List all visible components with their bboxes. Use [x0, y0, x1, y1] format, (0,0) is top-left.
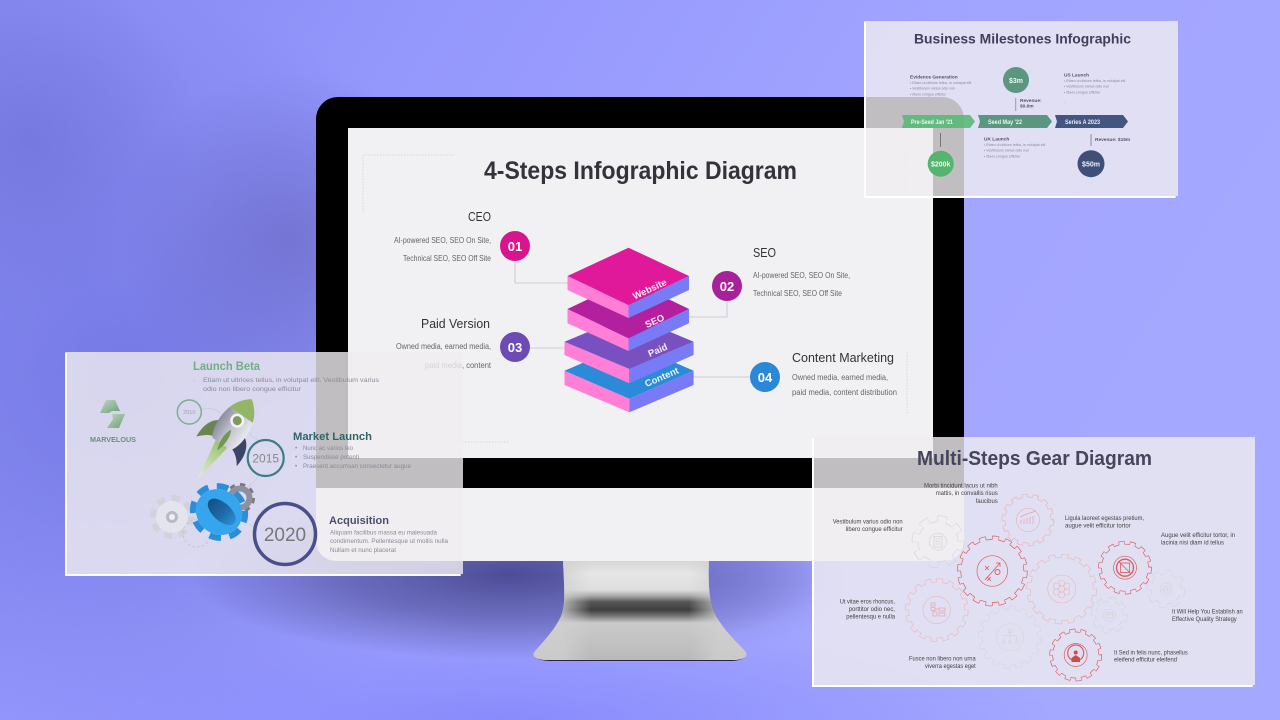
gear notes: It Will Help You Establish an	[1172, 609, 1243, 616]
slide title: 4-Steps Infographic Diagram	[484, 157, 797, 185]
note: evidence generation	[910, 74, 972, 96]
milestone: 50m	[1078, 134, 1130, 177]
gear: chart	[1002, 494, 1054, 546]
note: uk launch: UK Launch	[984, 136, 1009, 142]
step 04: 04	[758, 370, 773, 385]
layer: paid: Paid	[647, 342, 670, 360]
milestone: 200k	[928, 133, 954, 177]
acquisition: condimentum. Pellentesque ut mollis nulla	[330, 538, 449, 545]
monitor bezel	[316, 97, 964, 488]
gear notes: Fusce non libero non urna	[909, 656, 976, 663]
heading: launch beta	[193, 361, 379, 393]
milestone: 50m: Revenue: $15m	[1095, 137, 1130, 143]
step 04: paid media, content distribution	[792, 388, 897, 397]
corner guides	[363, 140, 922, 442]
year 2015: 2015	[252, 452, 279, 466]
layer: content	[564, 343, 694, 412]
layer: seo: SEO	[644, 313, 666, 331]
step 01: CEO	[468, 210, 491, 224]
gear: percent	[957, 536, 1027, 606]
gear notes: pellentesqu e nulla	[846, 613, 895, 620]
gear notes: faucibus	[976, 498, 998, 505]
heading: launch beta: ·	[193, 377, 195, 384]
heading: launch beta: odio non libero congue efficitur	[203, 386, 301, 393]
step 03	[396, 317, 530, 370]
panel heading: Business Milestones Infographic	[914, 30, 1131, 46]
note: us launch: • Vestibulum varius odio non	[1064, 84, 1109, 88]
panel: business milestones	[864, 21, 1178, 198]
gear notes: porttitor odio nec,	[849, 606, 895, 613]
milestone: 3m	[1003, 67, 1042, 111]
year 2010: 2010	[183, 410, 195, 416]
step 03: Paid Version	[421, 317, 490, 331]
panel card	[864, 21, 1178, 198]
panel card	[812, 437, 1255, 687]
panel heading: Multi-Steps Gear Diagram	[917, 448, 1152, 470]
monitor screen	[348, 128, 933, 458]
gear notes: It Sed in felis nunc, phasellus	[1114, 649, 1188, 656]
note: uk launch: • libero congue efficitur	[984, 154, 1021, 158]
dark gear	[227, 485, 253, 511]
gear: hierarchy	[978, 606, 1042, 669]
step 02: SEO	[753, 246, 776, 260]
gear notes: Ut vitae eros rhoncus,	[840, 599, 895, 606]
light gear	[153, 498, 191, 536]
logo: marvelous	[90, 400, 136, 444]
year 2020: 2020	[264, 525, 306, 546]
milestone: 3m: Revenue:	[1020, 98, 1042, 104]
milestone bar: pre-seed	[902, 115, 975, 128]
monitor stand	[533, 560, 747, 661]
layer: seo	[568, 280, 689, 351]
connector lines	[515, 260, 750, 377]
step 03: Owned media, earned media,	[396, 342, 491, 351]
market launch: Nunc ac varius leo	[303, 445, 354, 452]
note: evidence generation: Evidence Generation	[910, 74, 958, 80]
stacked layers diagram	[564, 248, 694, 412]
market launch: Praesent accumsan consectetur augue	[303, 463, 412, 470]
step 02: Technical SEO, SEO Off Site	[753, 289, 842, 298]
icon: gears	[153, 475, 256, 549]
connector curves	[201, 408, 260, 530]
gear: flow	[905, 578, 968, 642]
gear: network	[1050, 629, 1102, 681]
milestone: 50m: $50m	[1082, 162, 1100, 168]
milestone bar: seed	[978, 115, 1052, 128]
note: us launch: • Etiam ut ultrices tellus, in volutpat elit.	[1064, 79, 1126, 83]
step 04: Owned media, earned media,	[792, 373, 888, 382]
step 03: 03	[508, 340, 522, 355]
thin gear	[183, 519, 211, 547]
gear notes: augue velit efficitur tortor	[1065, 523, 1132, 530]
step 04: Content Marketing	[792, 351, 894, 365]
gear: blocked	[1098, 541, 1152, 594]
step 02: 02	[720, 279, 734, 294]
blue gear	[182, 475, 256, 549]
monitor	[316, 97, 964, 561]
year 2010	[177, 400, 201, 424]
milestone bar: series a	[1055, 115, 1128, 128]
gear: hexagons	[1027, 554, 1097, 624]
label: content: Content	[643, 365, 681, 390]
milestone: 3m: $0.6m	[1020, 104, 1034, 110]
market launch: Market Launch	[293, 431, 372, 443]
gear notes: Augue velit efficitur tortor, in	[1161, 532, 1235, 539]
year 2020	[254, 504, 316, 564]
gear notes: libero congue efficitur	[846, 526, 904, 533]
panel card	[65, 352, 463, 576]
market launch: •	[295, 445, 297, 452]
gear notes: eleifend efficitur eleifend	[1114, 657, 1177, 664]
note: uk launch: • Etiam ut ultrices tellus, in volutpat elit.	[984, 143, 1046, 147]
gear: document	[912, 516, 964, 568]
market launch	[293, 431, 412, 470]
step 01: 01	[508, 239, 522, 254]
market launch: •	[295, 463, 297, 470]
note: uk launch	[984, 136, 1046, 158]
milestone bar: series a: Series A 2023	[1065, 120, 1101, 126]
step 02: AI-powered SEO, SEO On Site,	[753, 271, 850, 280]
acquisition: Acquisition	[329, 515, 389, 527]
gear notes	[833, 482, 1243, 670]
gear: target	[1147, 570, 1185, 608]
layer: paid	[564, 315, 694, 383]
monitor chin	[316, 488, 964, 561]
gear notes: viverra egestas eget	[925, 663, 976, 670]
step 01: AI-powered SEO, SEO On Site,	[394, 236, 491, 245]
market launch: •	[295, 454, 297, 461]
gear notes: mattis, in convallis risus	[936, 490, 998, 497]
milestone bar: seed: Seed May '22	[988, 120, 1023, 126]
note: us launch	[1064, 72, 1126, 104]
note: us launch: -	[1064, 100, 1066, 104]
note: evidence generation: • Vestibulum varius odio non	[910, 86, 955, 90]
acquisition: Nullam et nunc placerat	[330, 547, 396, 554]
note: us launch: US Launch	[1064, 72, 1089, 78]
year 2015	[248, 440, 284, 476]
gear notes: Vestibulum varius odio non	[833, 519, 903, 526]
step 03: paid media, content	[425, 361, 492, 370]
logo: marvelous: MARVELOUS	[90, 437, 136, 444]
acquisition: Aliquam facilibus massa eu malesuada	[330, 529, 438, 536]
gear notes: Morbi tincidunt lacus ut nibh	[924, 482, 998, 490]
milestone: 3m: $3m	[1009, 78, 1023, 85]
step 04	[750, 351, 897, 397]
heading: launch beta: Etiam ut ultrices tellus, in volutpat elit. Vestibulum varius	[203, 377, 379, 384]
milestone: 200k: $200k	[931, 162, 951, 168]
step 02	[712, 246, 850, 301]
step 01	[394, 210, 530, 263]
gear notes: Effective Quality Strategy	[1172, 616, 1237, 623]
heading: launch beta: Launch Beta	[193, 361, 261, 373]
gear: card	[1091, 597, 1127, 633]
panel: gear diagram	[812, 437, 1255, 687]
acquisition	[329, 515, 449, 554]
gear notes: lacinia nisi diam id tellus	[1161, 539, 1224, 546]
step 01: Technical SEO, SEO Off Site	[403, 254, 491, 263]
icon: rocket	[177, 385, 273, 494]
gear notes: Ligula laoreet egestas pretium,	[1065, 515, 1144, 522]
milestone bar: pre-seed: Pre-Seed Jan '21	[911, 120, 954, 126]
note: us launch: • libero congue efficitur	[1064, 90, 1101, 94]
market launch: Suspendisse potenti	[303, 454, 359, 461]
note: evidence generation: • Etiam ut ultrices tellus, in volutpat elit.	[910, 81, 972, 85]
note: evidence generation: • libero congue efficitur	[910, 92, 947, 96]
layer: website	[568, 248, 689, 318]
layer: website: Website	[631, 277, 669, 302]
note: uk launch: • Vestibulum varius odio non	[984, 148, 1029, 152]
panel: launch roadmap	[65, 352, 463, 576]
